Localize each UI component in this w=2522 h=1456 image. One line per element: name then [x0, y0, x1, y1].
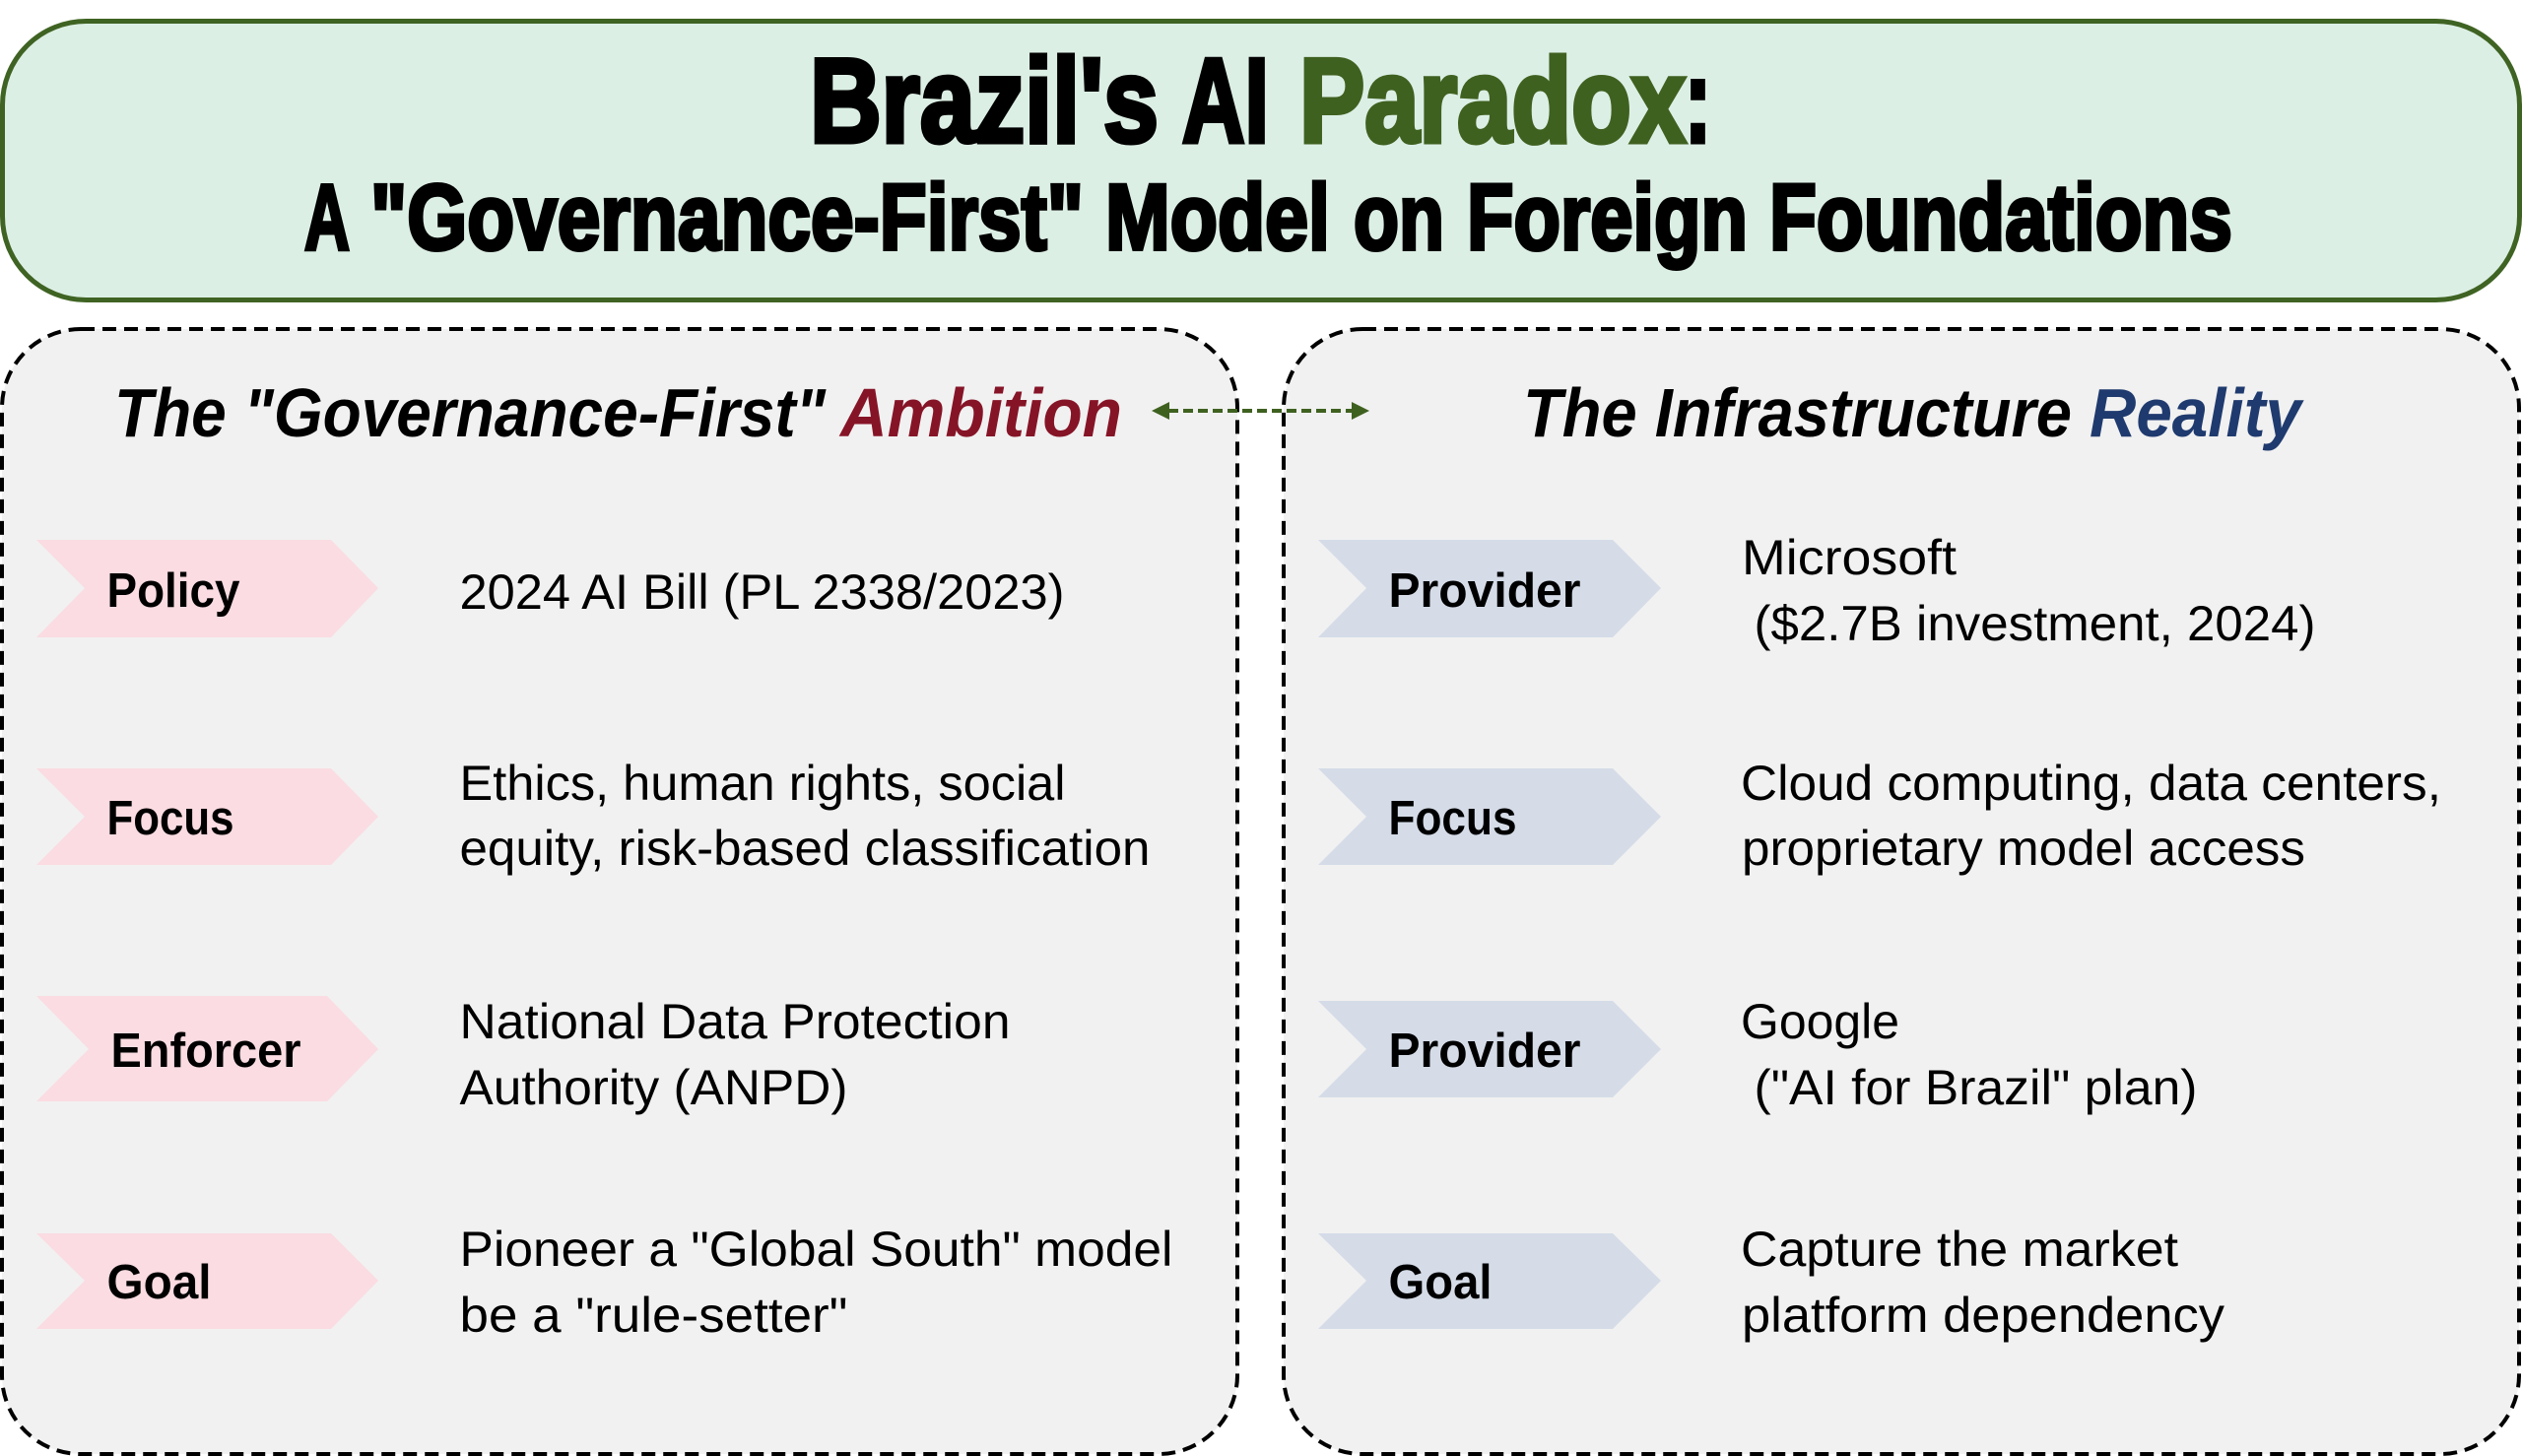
- panel: infrastructure reality: [1284, 329, 2519, 1454]
- row: enforcer: Enforcer: [110, 1025, 301, 1078]
- row: enforcer: Authority (ANPD): [459, 1060, 847, 1115]
- right panel background: [1284, 329, 2519, 1454]
- title line 2: on: [1354, 165, 1444, 270]
- row: policy: 2024 AI Bill (PL 2338/2023): [459, 564, 1064, 620]
- row: goal: platform dependency: [1742, 1288, 2224, 1343]
- row: provider microsoft: [1318, 530, 2315, 651]
- row: provider microsoft: ($2.7B investment, 2024): [1754, 596, 2315, 651]
- row: provider google: ("AI for Brazil" plan): [1754, 1060, 2197, 1115]
- row: provider google: Provider: [1389, 1025, 1580, 1078]
- title line 2: A: [304, 165, 350, 270]
- arrow: double-headed connector between panels: [1152, 402, 1369, 420]
- row: goal: Capture the market: [1741, 1222, 2178, 1277]
- row: provider google: [1318, 994, 2197, 1115]
- row: policy: [36, 540, 1064, 637]
- title banner: [2, 22, 2520, 299]
- panel: governance-first ambition: [2, 329, 1237, 1454]
- row: goal: Goal: [106, 1256, 211, 1309]
- row: focus: Focus: [1389, 792, 1517, 845]
- row: focus: equity, risk-based classification: [459, 821, 1151, 876]
- row: enforcer: National Data Protection: [459, 994, 1011, 1049]
- title line 2: [304, 165, 2232, 270]
- title line 1: [810, 33, 1711, 167]
- row: focus: [1318, 756, 2441, 876]
- row: focus: [36, 756, 1151, 876]
- row: provider google: Google: [1741, 994, 1899, 1049]
- title line 1: :: [1685, 33, 1711, 167]
- left panel heading: The "Governance-First": [114, 374, 827, 451]
- title line 2: "Governance-First": [370, 165, 1084, 270]
- row: focus: Ethics, human rights, social: [459, 756, 1066, 811]
- row: goal: Pioneer a "Global South" model: [459, 1222, 1172, 1277]
- row: focus: Focus: [106, 792, 234, 845]
- row: goal: [36, 1222, 1172, 1343]
- banner background: [2, 22, 2520, 299]
- title line 1: Brazil's: [810, 33, 1159, 167]
- right panel heading: The Infrastructure: [1523, 374, 2072, 451]
- row: goal: be a "rule-setter": [459, 1288, 847, 1343]
- row: policy: Policy: [106, 564, 240, 618]
- title line 2: Model: [1105, 165, 1330, 270]
- row: provider microsoft: Provider: [1389, 564, 1580, 618]
- title line 1: AI: [1182, 33, 1269, 167]
- row: goal: Goal: [1389, 1256, 1492, 1309]
- row: enforcer: [36, 994, 1011, 1115]
- title line 1: Paradox: [1299, 33, 1686, 167]
- title line 2: Foundations: [1769, 165, 2232, 270]
- row: goal: [1318, 1222, 2224, 1343]
- row: provider microsoft: Microsoft: [1742, 530, 1957, 585]
- row: focus: Cloud computing, data centers,: [1741, 756, 2441, 811]
- right panel heading: Reality: [2090, 374, 2304, 451]
- left panel heading: Ambition: [838, 374, 1122, 451]
- left panel background: [2, 329, 1237, 1454]
- row: focus: proprietary model access: [1742, 821, 2305, 876]
- title line 2: Foreign: [1467, 165, 1748, 270]
